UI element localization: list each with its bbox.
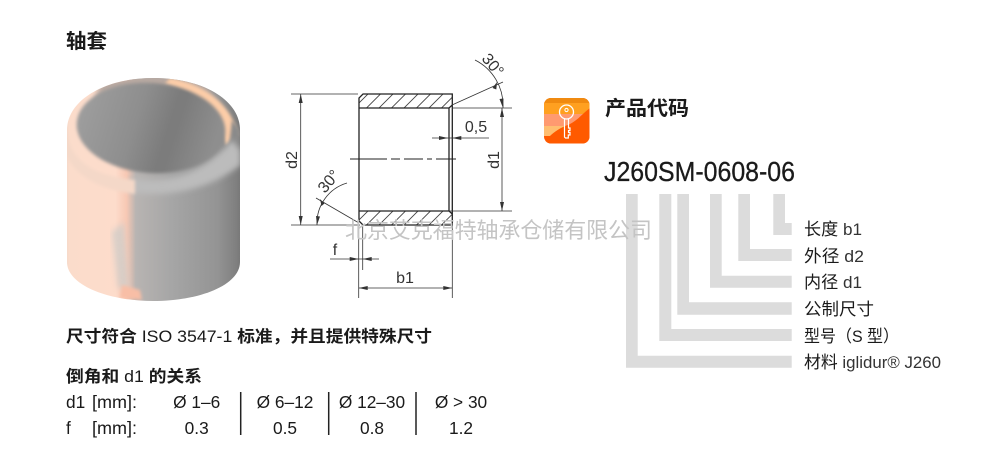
- rim shading: [94, 78, 216, 98]
- chamfer table: [mm]:: [92, 418, 137, 438]
- dimension lines: [291, 60, 512, 298]
- chamfer table: 0.5: [273, 418, 297, 438]
- chamfer table: [66, 392, 487, 438]
- code breakdown labels: 外径 d2: [804, 247, 864, 266]
- code breakdown labels: 长度 b1: [804, 220, 862, 239]
- watermark: 北京艾克福特轴承仓储有限公司: [345, 218, 652, 243]
- dimension labels: f: [333, 242, 338, 259]
- dimension labels: d2: [284, 151, 301, 169]
- technical drawing: [284, 51, 512, 298]
- chamfer table: 0.8: [360, 418, 384, 438]
- code breakdown labels: [804, 220, 941, 372]
- code breakdown brackets: [626, 194, 792, 368]
- code breakdown labels: 内径 d1: [804, 273, 862, 292]
- dimension labels: [284, 51, 507, 287]
- code breakdown labels: 材料 iglidur® J260: [804, 353, 941, 372]
- chamfer table: 1.2: [449, 418, 473, 438]
- chamfer table: Ø 12–30: [339, 392, 405, 412]
- dimension labels: 0,5: [465, 119, 487, 136]
- illustration: bearing sleeve: [67, 78, 240, 301]
- dimension labels: 30°: [478, 51, 507, 80]
- chamfer table: f: [66, 418, 71, 438]
- chamfer table: d1: [66, 392, 85, 412]
- table heading: 倒角和 d1 的关系: [66, 366, 202, 386]
- icon: key: [544, 98, 590, 144]
- code breakdown labels: 公制尺寸: [804, 300, 874, 319]
- chamfer table: 0.3: [185, 418, 209, 438]
- dimension labels: 30°: [315, 167, 344, 197]
- section outline: [350, 93, 456, 226]
- dimension labels: d1: [486, 151, 503, 169]
- chamfer table: Ø 1–6: [173, 392, 220, 412]
- chamfer table: Ø > 30: [435, 392, 487, 412]
- dimension labels: b1: [396, 270, 414, 287]
- heading: product code: 产品代码: [605, 97, 689, 120]
- title: 轴套: [66, 30, 107, 53]
- chamfer table: Ø 6–12: [257, 392, 313, 412]
- bore: [74, 78, 228, 178]
- code breakdown labels: 型号（S 型）: [804, 327, 899, 346]
- chamfer table: [mm]:: [92, 392, 137, 412]
- product code value: J260SM-0608-06: [604, 156, 795, 187]
- standard note: 尺寸符合 ISO 3547-1 标准，并且提供特殊尺寸: [66, 326, 432, 346]
